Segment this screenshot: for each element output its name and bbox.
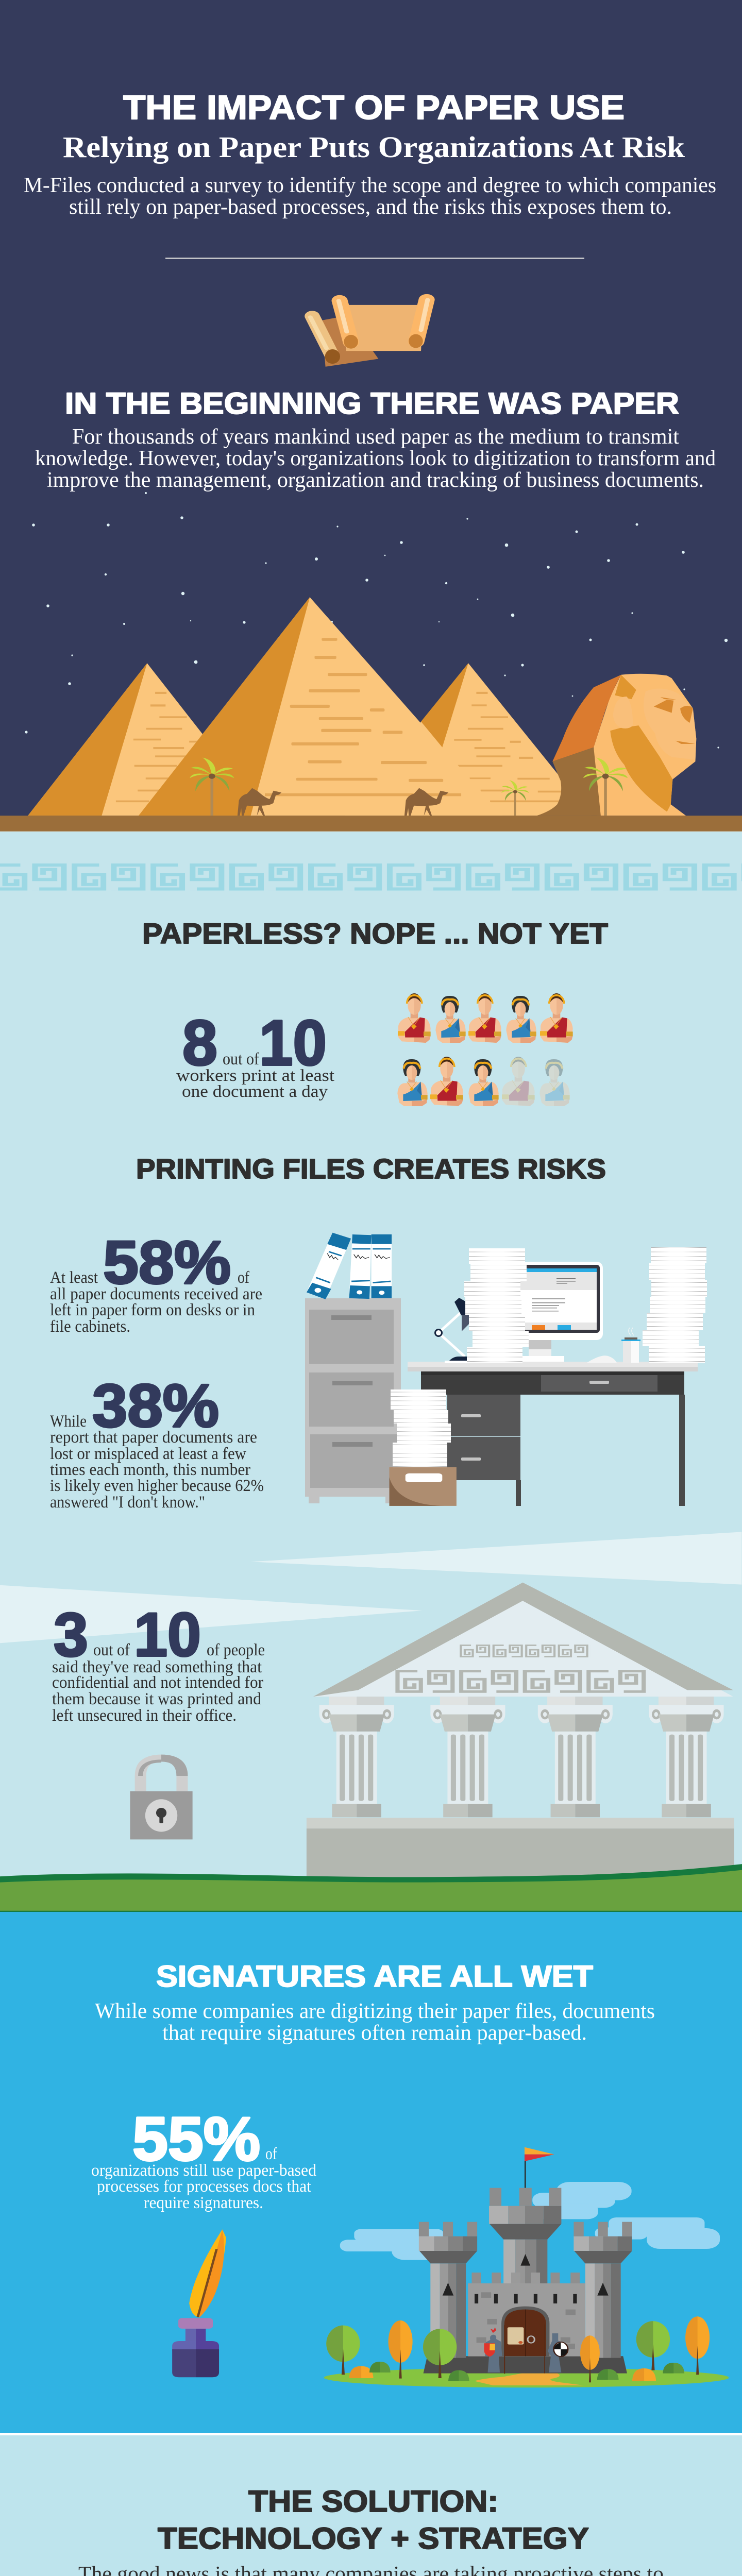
heading: the solution: TECHNOLOGY + STRATEGY: [158, 2522, 589, 2555]
stat: 8 out of 10: 8: [182, 1008, 217, 1079]
temple frieze: small meander: [460, 1645, 591, 1657]
paper stack: floor: [391, 1389, 451, 1468]
paragraph: paper history: knowledge. However, today's organizations look to digitization to transform and: [35, 447, 716, 470]
great pyramid: [139, 597, 502, 816]
trees: [326, 2316, 710, 2382]
left pyramid: [28, 663, 266, 816]
subtitle: Relying on Paper Puts Organizations At Risk: [63, 130, 685, 164]
paragraph: signatures: While some companies are digitizing their paper files, documents: [95, 1999, 655, 2023]
stat: 38 percent: answered "I don't know.": [50, 1493, 205, 1512]
temple columns: [319, 1697, 724, 1817]
paragraph: signatures: that require signatures often remain paper-based.: [162, 2021, 587, 2045]
stat: 38 percent: 38%: [92, 1372, 219, 1440]
illustration: paper stacks: [391, 1247, 707, 1468]
paragraph: paper history: improve the management, organization and tracking of business documents.: [47, 468, 704, 492]
divider: [165, 258, 584, 259]
stat: 3 out of 10: of people: [207, 1641, 265, 1659]
pyramids and sphinx scene: [0, 597, 742, 832]
stat: 38 percent: [50, 1372, 264, 1512]
grass hill: [0, 1864, 742, 1912]
stat: 3 out of 10: them because it was printed and: [52, 1690, 261, 1708]
stat: 58 percent: At least: [50, 1268, 98, 1287]
illustration: filing cabinet with binders: [305, 1233, 401, 1503]
sphinx: [537, 674, 696, 816]
palm trees: [190, 757, 628, 816]
intro paragraph: [24, 174, 716, 219]
illustration: desk: [408, 1362, 698, 1506]
background: solution section: [0, 2435, 742, 2576]
heading: printing files: PRINTING FILES CREATES RISKS: [136, 1154, 606, 1184]
stat: 3 out of 10: [52, 1600, 265, 1725]
title: THE IMPACT OF PAPER USE: [123, 88, 625, 126]
stat: 8 out of 10: 10: [259, 1008, 327, 1079]
bushes: [349, 2362, 684, 2381]
stat: 55 percent paper signatures: 55%: [132, 2105, 260, 2174]
illustration: desk lamp: [435, 1298, 469, 1363]
background: night sky: [0, 0, 742, 824]
paper stack: right: [643, 1247, 707, 1363]
stat: 38 percent: report that paper documents are: [50, 1428, 257, 1447]
heading: the solution: THE SOLUTION:: [248, 2485, 498, 2518]
illustration: mouse and coffee cup: [587, 1328, 640, 1363]
stat: 58 percent: left in paper form on desks or in: [50, 1301, 255, 1319]
stat: 58 percent: all paper documents received are: [50, 1285, 262, 1303]
stat: 58 percent: file cabinets.: [50, 1317, 130, 1336]
stat: 38 percent: While: [50, 1412, 87, 1431]
stat: 3 out of 10: said they've read something that: [52, 1658, 262, 1676]
stat: 8 out of 10: one document a day: [182, 1082, 328, 1101]
heading: signatures: SIGNATURES ARE ALL WET: [156, 1960, 593, 1993]
background: blue signatures section: [0, 1910, 742, 2433]
stat: 38 percent: lost or misplaced at least a few: [50, 1445, 246, 1463]
meander band: [0, 863, 742, 891]
background: pale blue section: [0, 832, 742, 1910]
illustration: computer monitor: [510, 1262, 603, 1362]
stat: 55 percent paper signatures: processes for processes docs that: [97, 2177, 311, 2196]
stat: 3 out of 10: 3: [54, 1600, 88, 1669]
knights: [484, 2325, 568, 2374]
central tower: [489, 2147, 561, 2284]
clouds behind temple: [0, 1532, 741, 1643]
medium pyramid: [345, 663, 592, 816]
stat: 58 percent: 58%: [103, 1229, 231, 1297]
divider: white strip: [0, 2433, 742, 2435]
illustration: castle: [324, 2147, 729, 2387]
stat: 8 out of 10: out of: [223, 1050, 259, 1069]
intro paragraph: still rely on paper-based processes, and the risks this exposes them to.: [69, 195, 672, 219]
temple frieze: large meander: [395, 1670, 650, 1693]
heading: paperless: PAPERLESS? NOPE ... NOT YET: [142, 917, 608, 950]
stat: 3 out of 10: left unsecured in their office.: [52, 1706, 237, 1725]
stat: 38 percent: times each month, this number: [50, 1461, 250, 1479]
castle wall: [468, 2273, 585, 2357]
stat: 55 percent paper signatures: organizations still use paper-based: [91, 2161, 316, 2180]
stat: 8 out of 10: [176, 1008, 334, 1101]
stat: 55 percent paper signatures: require signatures.: [144, 2194, 263, 2212]
pictogram: ten workers: [397, 993, 573, 1106]
clouds: [340, 2182, 720, 2260]
icon: quill and ink bottle: [172, 2229, 226, 2377]
camels: [238, 788, 448, 816]
side towers: [419, 2222, 632, 2358]
castle door: [501, 2307, 549, 2356]
stat: 55 percent paper signatures: of: [265, 2145, 277, 2163]
heading: the solution: [158, 2485, 589, 2555]
paragraph: paper history: For thousands of years mankind used paper as the medium to transmit: [72, 425, 679, 449]
stars: [25, 492, 728, 749]
stat: 58 percent: of: [238, 1268, 249, 1287]
stat: 55 percent paper signatures: [91, 2105, 316, 2212]
icon: paper scrolls: [310, 300, 428, 367]
stat: 58 percent: [50, 1229, 262, 1336]
stat: 38 percent: is likely even higher because 62%: [50, 1477, 264, 1495]
desert ground: [0, 816, 742, 832]
illustration: greek temple: [307, 1583, 734, 1882]
heading: in the beginning: IN THE BEGINNING THERE WAS PAPER: [65, 387, 679, 420]
illustration: cardboard box: [390, 1467, 457, 1506]
intro paragraph: M-Files conducted a survey to identify the scope and degree to which companies: [24, 174, 716, 197]
stat: 3 out of 10: out of: [93, 1641, 130, 1659]
paper stack: left: [464, 1248, 529, 1363]
illustration: padlock: [130, 1758, 193, 1839]
paragraph: paper history: [35, 425, 716, 492]
stat: 3 out of 10: 10: [134, 1600, 201, 1669]
stat: 3 out of 10: confidential and not intended for: [52, 1673, 263, 1692]
paragraph: signatures: [95, 1999, 655, 2045]
stat: 8 out of 10: workers print at least: [176, 1066, 334, 1085]
